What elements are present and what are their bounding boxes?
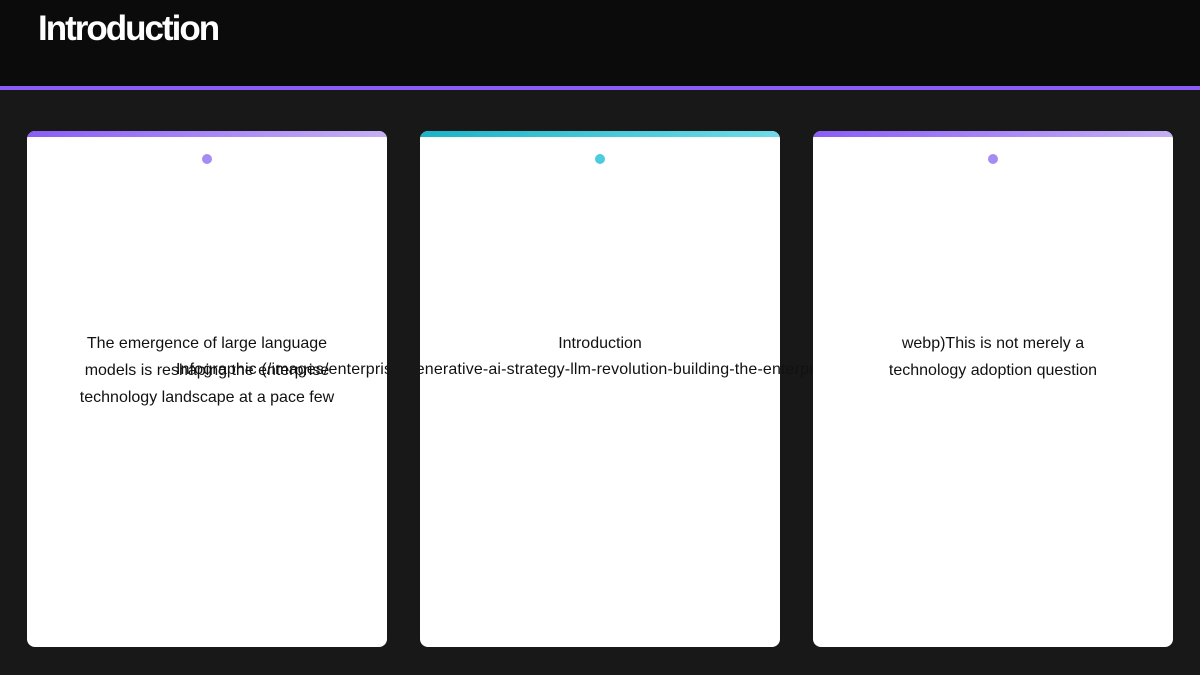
text: card 3: webp)This is not merely a	[902, 335, 1084, 352]
icon: dot 1	[202, 154, 212, 164]
icon: dot 2	[595, 154, 605, 164]
panel: card 1	[27, 131, 387, 647]
text: card 3: technology adoption question	[889, 362, 1097, 379]
panel: card 3	[813, 131, 1173, 647]
panel: card 2	[420, 131, 780, 647]
header	[0, 0, 1200, 86]
title: Introduction	[38, 9, 218, 48]
text: card 1: models is reshaping the enterprise	[85, 362, 329, 379]
text: card 1: technology landscape at a pace few	[80, 389, 334, 406]
text: card 1: The emergence of large language	[87, 335, 327, 352]
icon: dot 3	[988, 154, 998, 164]
text: card 1	[80, 335, 334, 406]
text: card 2: Introduction	[558, 335, 642, 352]
text: card 3	[889, 335, 1097, 379]
